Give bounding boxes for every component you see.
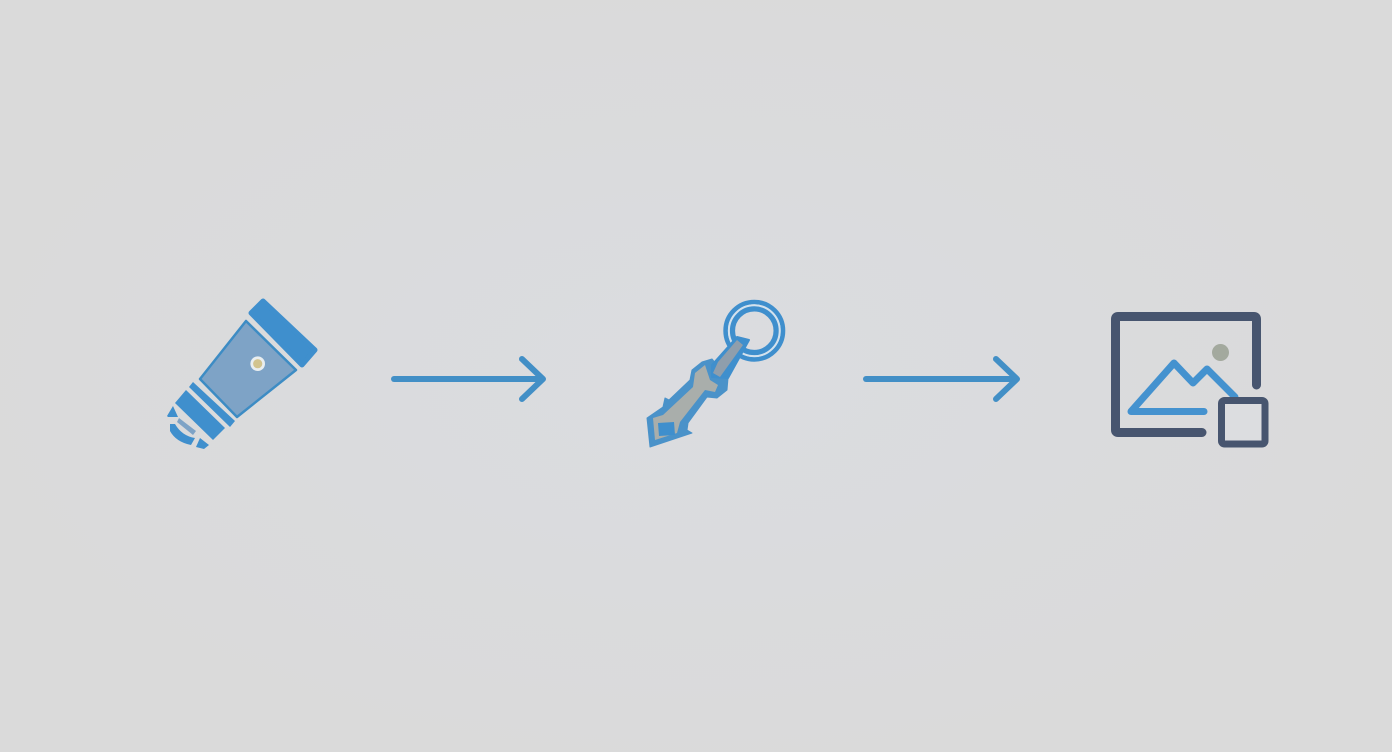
icon: wrench key on ring [647, 302, 783, 447]
icon: picture frame with mountains [1116, 316, 1265, 444]
icon: flashlight [167, 301, 315, 449]
arrow: wrench to image [866, 359, 1017, 399]
arrow: flashlight to wrench [394, 359, 543, 399]
